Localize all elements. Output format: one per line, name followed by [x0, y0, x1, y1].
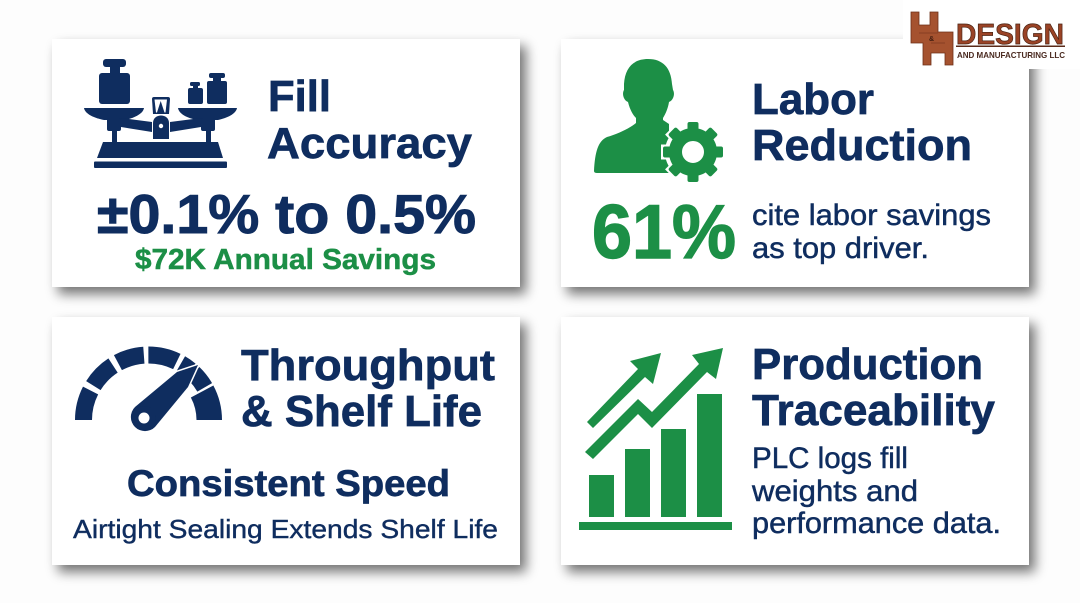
logo: H&H Design and Manufacturing: DESIGN [956, 19, 1064, 51]
icon: growth bar chart with arrows [579, 348, 732, 530]
heading: labor reduction: Reduction [752, 121, 972, 170]
stat: fill accuracy range: ±0.1% to 0.5% [97, 183, 476, 245]
panel: production traceability [561, 317, 1029, 565]
text: annual savings: $72K Annual Savings [135, 244, 436, 276]
icon: balance scale with weights [84, 59, 237, 168]
heading: labor reduction: Labor [752, 75, 874, 124]
heading: throughput and shelf life [241, 341, 495, 436]
heading: production traceability: Traceability [752, 386, 996, 435]
text: labor savings description: as top driver. [752, 232, 929, 265]
icon: speedometer gauge [84, 355, 214, 431]
heading: fill accuracy [267, 72, 473, 168]
panel: fill accuracy [52, 39, 520, 287]
text: PLC logs description: performance data. [752, 507, 1001, 540]
text: airtight sealing: Airtight Sealing Extends Shelf Life [73, 514, 498, 544]
text: labor savings description: cite labor savings [752, 199, 991, 232]
heading: throughput and shelf life: Throughput [241, 341, 495, 390]
text: PLC logs description: PLC logs fill [752, 442, 908, 475]
stat: 61 percent: 61% [592, 190, 736, 275]
panel: throughput and shelf life [52, 317, 520, 565]
heading: fill accuracy: Accuracy [267, 119, 473, 168]
heading: fill accuracy: Fill [268, 72, 331, 121]
heading: production traceability: Production [752, 340, 983, 389]
panel: labor reduction [561, 39, 1029, 287]
logo: H&H Design and Manufacturing [903, 0, 1080, 69]
logo: H&H Design and Manufacturing: & [929, 36, 934, 43]
heading: throughput and shelf life: & Shelf Life [241, 387, 482, 436]
text: consistent speed: Consistent Speed [127, 463, 450, 504]
heading: production traceability [752, 340, 996, 435]
text: PLC logs description: weights and [751, 475, 918, 508]
logo: H&H Design and Manufacturing: AND MANUFACTURING LLC [957, 50, 1065, 60]
text: PLC logs description [751, 442, 1001, 540]
icon: person with gear [594, 59, 723, 182]
text: labor savings description [752, 199, 991, 265]
heading: labor reduction [752, 75, 972, 170]
